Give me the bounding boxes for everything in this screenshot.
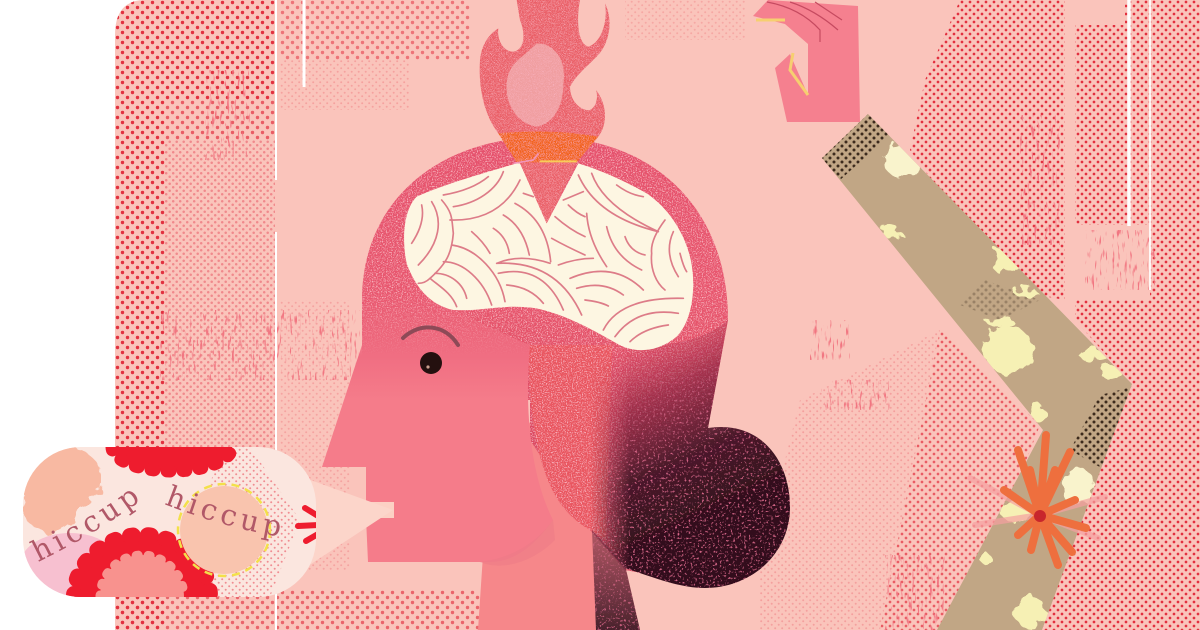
red flower top — [112, 447, 232, 471]
flame yellow highlight — [540, 158, 577, 164]
halftone texture: left panel — [115, 0, 480, 630]
sunburst centre — [1034, 510, 1046, 522]
pink crease across base — [513, 153, 538, 163]
peach flower with yellow edge — [178, 484, 270, 576]
mouth slit — [364, 502, 394, 518]
halftone texture: upper centre fade — [280, 0, 745, 570]
hair: dome and back of head — [362, 137, 728, 585]
yellow fingernail edges — [756, 20, 808, 95]
face profile — [322, 270, 555, 566]
neck — [478, 420, 640, 630]
hair strand in front of ear — [528, 345, 612, 540]
speech bubble tail — [305, 478, 393, 568]
halftone texture: right panel — [760, 0, 1200, 630]
cream floral blobs — [880, 143, 1120, 628]
sunburst of pain on the elbow — [970, 435, 1105, 565]
peach flower top-left — [18, 446, 102, 532]
pink lower-left patch — [24, 533, 105, 596]
dark back hair — [590, 320, 790, 588]
flame orange base — [498, 131, 598, 162]
brain — [404, 163, 693, 350]
brain fold lines — [412, 172, 687, 342]
eyebrow — [403, 327, 458, 345]
finger crease lines — [767, 2, 842, 42]
dark halftone band: arm top — [822, 114, 888, 179]
hand pinching — [753, 0, 860, 122]
red flower bottom — [74, 535, 210, 597]
hiccup word 1: hiccup — [29, 491, 138, 562]
dark halftone band: arm middle — [960, 280, 1040, 320]
dark halftone band: elbow — [1072, 387, 1131, 467]
bubble halftone — [210, 447, 300, 597]
white vertical scratches — [276, 0, 1150, 630]
flame inner glow — [507, 43, 564, 127]
hiccup word 2: hiccup — [165, 484, 280, 541]
dark speckle stripe on neck — [592, 530, 640, 630]
eye — [420, 352, 442, 374]
arm: tan patterned strip — [815, 105, 1140, 630]
red petals at right edge — [298, 508, 318, 541]
flame — [480, 0, 610, 223]
speech bubble: hiccup — [23, 447, 316, 597]
jaw shadow — [480, 520, 555, 566]
grunge print marks — [160, 70, 1155, 630]
